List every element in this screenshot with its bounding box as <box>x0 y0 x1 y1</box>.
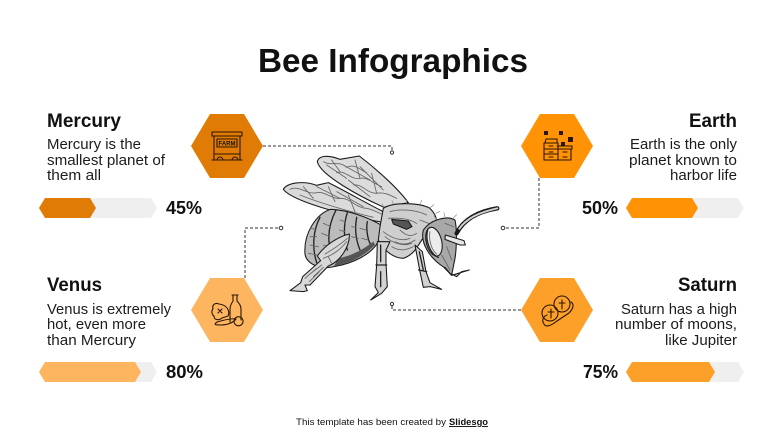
title: Bee Infographics <box>258 42 528 79</box>
hexagon icon: pastries <box>521 278 593 342</box>
panel: Venus <box>39 275 263 382</box>
connector: Mercury <box>263 146 394 154</box>
description: number of moons, <box>615 317 737 333</box>
description: like Jupiter <box>665 333 737 349</box>
description: hot, even more <box>47 317 146 333</box>
progress bar 75% <box>626 362 744 382</box>
progress bar 80% <box>39 362 157 382</box>
heading: Venus <box>47 275 102 296</box>
bee illustration <box>283 156 497 300</box>
percentage: 80% <box>166 362 203 382</box>
progress bar 50% <box>626 198 744 218</box>
hind leg <box>290 234 349 292</box>
description: Venus is extremely <box>47 302 172 318</box>
head <box>423 213 457 275</box>
description <box>47 137 166 184</box>
percentage: 45% <box>166 198 202 218</box>
heading: Mercury <box>47 111 121 132</box>
description: harbor life <box>670 168 737 184</box>
panel: Saturn <box>521 275 744 382</box>
abdomen <box>305 209 384 268</box>
description: Mercury is the <box>47 137 141 153</box>
description: smallest planet of <box>47 153 166 169</box>
percentage: 75% <box>583 362 618 382</box>
hexagon icon: beehives <box>521 114 593 178</box>
hexagon icon: food and bottle <box>191 278 263 342</box>
description: them all <box>47 168 101 184</box>
panel: Mercury <box>39 111 263 218</box>
heading: Saturn <box>678 275 737 296</box>
middle and front legs <box>371 242 469 300</box>
description: than Mercury <box>47 333 137 349</box>
thorax <box>378 199 440 258</box>
upper wing <box>317 156 408 207</box>
lower wing <box>283 183 402 224</box>
description <box>629 137 738 184</box>
description <box>615 302 737 349</box>
description: Saturn has a high <box>621 302 737 318</box>
heading: Earth <box>689 111 737 132</box>
connector: Earth <box>501 178 539 230</box>
description: planet known to <box>629 153 737 169</box>
footer credit: This template has been created by <box>296 417 446 428</box>
percentage: 50% <box>582 198 618 218</box>
progress bar 45% <box>39 198 157 218</box>
panel: Earth <box>521 111 744 218</box>
hexagon icon: farm sign <box>191 114 263 178</box>
description <box>47 302 172 349</box>
connector: Saturn <box>390 302 521 310</box>
footer credit: Slidesgo <box>449 417 488 428</box>
description: Earth is the only <box>630 137 738 153</box>
antennae <box>445 208 497 245</box>
hexagon icon: farm sign: FARM <box>218 142 236 148</box>
connector: Venus <box>245 226 283 278</box>
